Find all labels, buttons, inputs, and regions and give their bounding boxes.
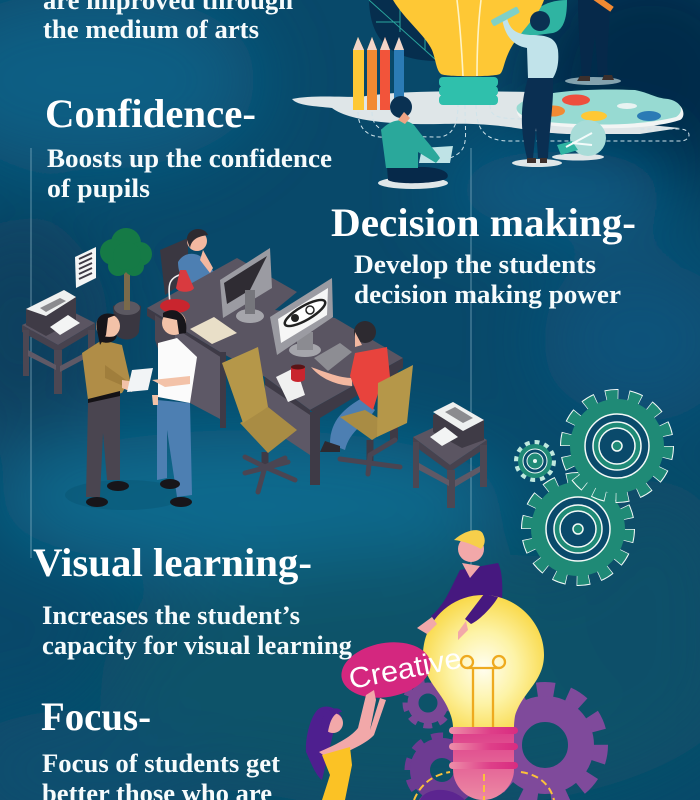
- text: visual learning: Increases the student’s: [42, 600, 300, 630]
- drawing tablet sheet on desk: [190, 317, 237, 344]
- vertical rule left: [30, 148, 32, 558]
- illustration: gears: [517, 396, 667, 579]
- text: visual learning: [42, 600, 352, 660]
- dashed connectors: [358, 105, 689, 158]
- vertical rule right: [470, 148, 472, 586]
- yellow bulb: [393, 0, 544, 76]
- woman at desk: [160, 229, 214, 295]
- man in red: [311, 321, 390, 452]
- glowing bulb: [423, 595, 544, 727]
- text: decision making: decision making power: [354, 279, 621, 309]
- illustration: office workspace: [22, 228, 487, 510]
- text: focus: [42, 748, 280, 800]
- L-shaped desks: [147, 258, 403, 485]
- left printer: [26, 290, 80, 336]
- gear: lower large: [528, 479, 628, 579]
- text: focus: Focus of students get: [42, 748, 280, 778]
- second standing figure legs: [565, 0, 621, 85]
- purple gear: lower: [409, 737, 475, 800]
- right printer: [430, 402, 484, 448]
- purple gear: small upper: [406, 681, 450, 725]
- floor shadows: [65, 480, 185, 510]
- monitor back: [220, 248, 272, 323]
- filament: [461, 656, 505, 727]
- illustration: glowing bulb with creative people: [306, 530, 598, 800]
- heading: focus: Focus-: [41, 694, 151, 739]
- bearded man: [82, 314, 135, 507]
- dark leaf: [369, 0, 450, 61]
- woman holding bubble: [306, 690, 386, 800]
- creative speech bubble: Creative: [346, 643, 464, 696]
- creative speech bubble: [337, 636, 464, 704]
- red mug and paper: [276, 364, 305, 402]
- man's arms: [417, 594, 498, 640]
- text: visual learning: capacity for visual learning: [42, 630, 352, 660]
- shaved man: [152, 310, 197, 507]
- monitor with rocket: [270, 278, 333, 357]
- palette: [517, 89, 683, 128]
- standing man: [490, 6, 562, 167]
- text: confidence: [47, 143, 332, 203]
- bulb filaments: [457, 0, 481, 76]
- teal leaf: [510, 0, 567, 38]
- pink bulb base: [449, 727, 518, 800]
- handed paper: [127, 368, 153, 392]
- wall note: [75, 247, 96, 288]
- red lamp: [160, 270, 194, 313]
- seated man: [378, 96, 453, 189]
- illustration: top creative team and bulb: [292, 0, 689, 189]
- bulb teal base: [439, 77, 498, 105]
- text: decision making: [354, 249, 621, 309]
- text: confidence: of pupils: [47, 173, 150, 203]
- text: intro continuation: the medium of arts: [43, 14, 259, 44]
- right printer table: [413, 402, 487, 508]
- purple gear: right large: [492, 692, 598, 798]
- text: intro continuation: [43, 0, 293, 44]
- light cloud shape: [292, 91, 680, 134]
- heading: confidence: Confidence-: [45, 91, 256, 136]
- heading: visual learning: Visual learning-: [33, 540, 312, 585]
- pencils: [353, 37, 404, 110]
- gear: upper large: [567, 396, 667, 496]
- small bulb: [552, 120, 606, 160]
- heading: decision making: Decision making-: [331, 200, 636, 245]
- dashed arcs: [414, 772, 554, 800]
- gear: small: [517, 443, 553, 479]
- text: confidence: Boosts up the confidence: [47, 143, 332, 173]
- man on top of bulb: [431, 530, 502, 622]
- chair left: [222, 347, 297, 492]
- left printer table: [22, 290, 95, 394]
- chair right: [340, 365, 413, 474]
- text: decision making: Develop the students: [354, 249, 596, 279]
- plant: [100, 228, 152, 340]
